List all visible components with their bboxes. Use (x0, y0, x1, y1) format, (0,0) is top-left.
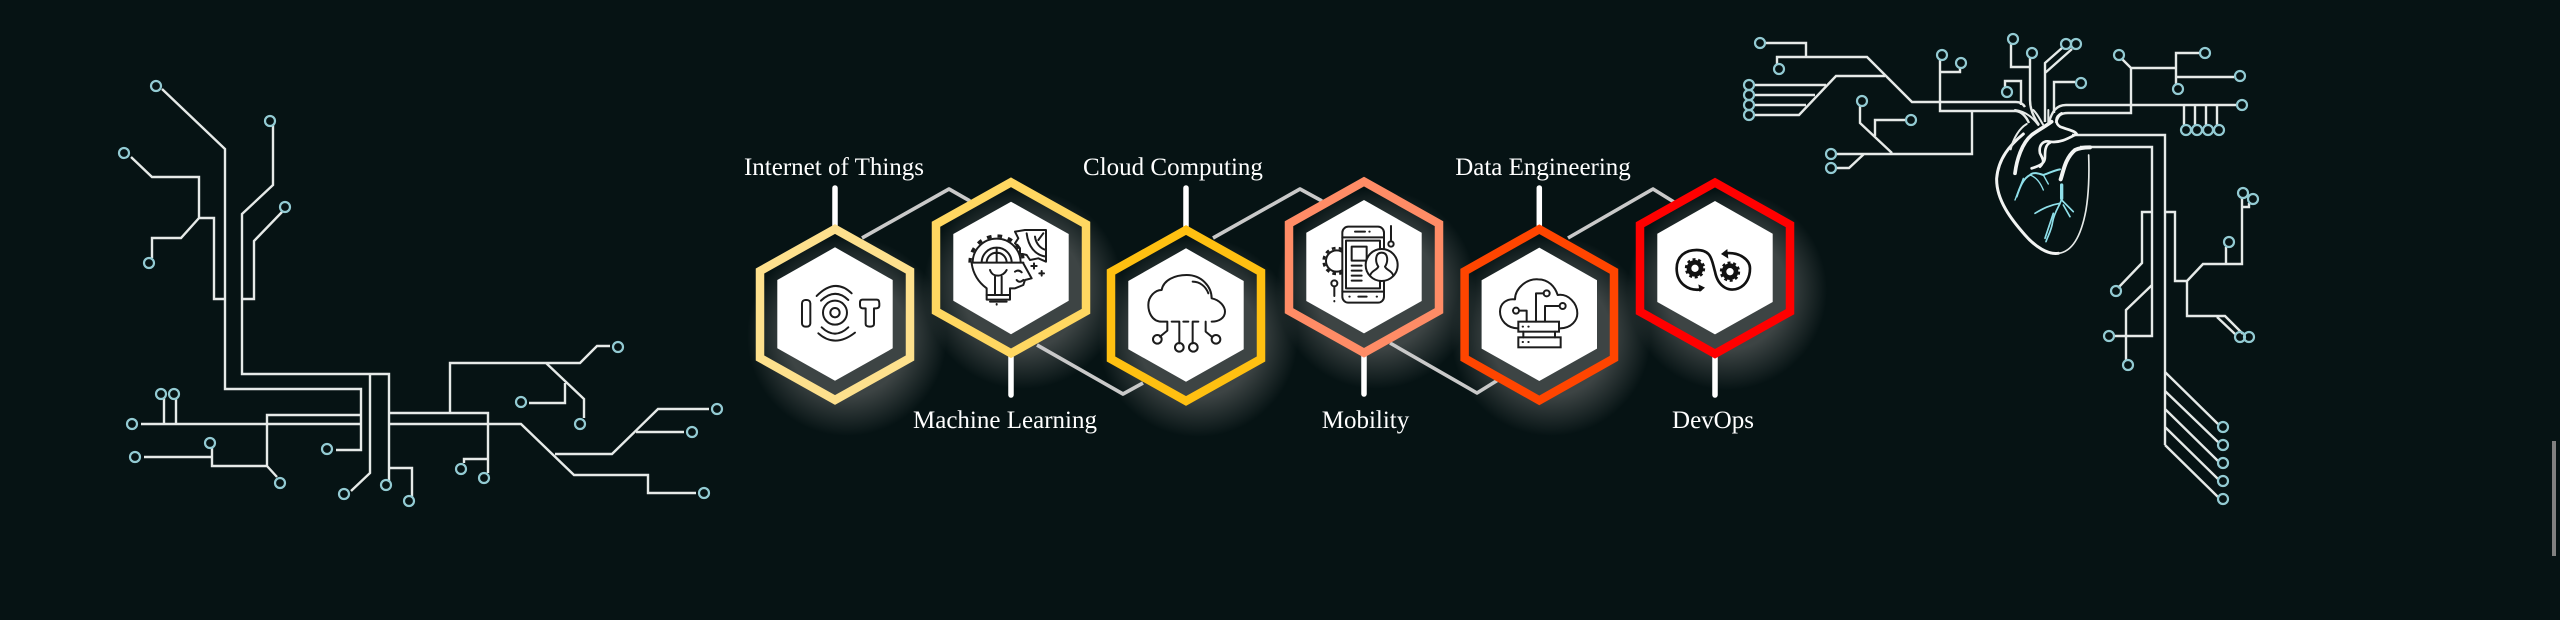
icon: cloud network (1148, 275, 1225, 352)
label: Internet of Things: Internet of Things (744, 154, 924, 181)
hexagon: DevOps (1640, 183, 1790, 434)
label: Data Engineering: Data Engineering (1455, 154, 1631, 181)
icon: IoT (802, 286, 879, 341)
right circuit board traces (1744, 34, 2258, 504)
hexagon: Data Engineering (1455, 154, 1631, 400)
icon: smartphone with user (1324, 226, 1398, 303)
scrollbar (2552, 441, 2556, 556)
label: Mobility: Mobility (1322, 407, 1410, 434)
icon: lightbulb and gears (970, 230, 1046, 305)
left circuit board traces (119, 81, 722, 506)
icon: gears infinity loop (1677, 249, 1750, 292)
icon: cloud server (1500, 279, 1577, 347)
hexagon: Internet of Things (744, 154, 924, 400)
hexagon glows (747, 189, 1827, 437)
label: Machine Learning: Machine Learning (913, 407, 1097, 434)
label: Cloud Computing: Cloud Computing (1083, 154, 1263, 181)
hexagon: Mobility (1289, 182, 1439, 434)
label: DevOps: DevOps (1672, 407, 1754, 434)
hexagon: Machine Learning (913, 182, 1097, 434)
icon: circuit heart (1997, 110, 2090, 254)
hexagon: Cloud Computing (1083, 154, 1263, 401)
connector lines between hexagons (862, 189, 1674, 394)
